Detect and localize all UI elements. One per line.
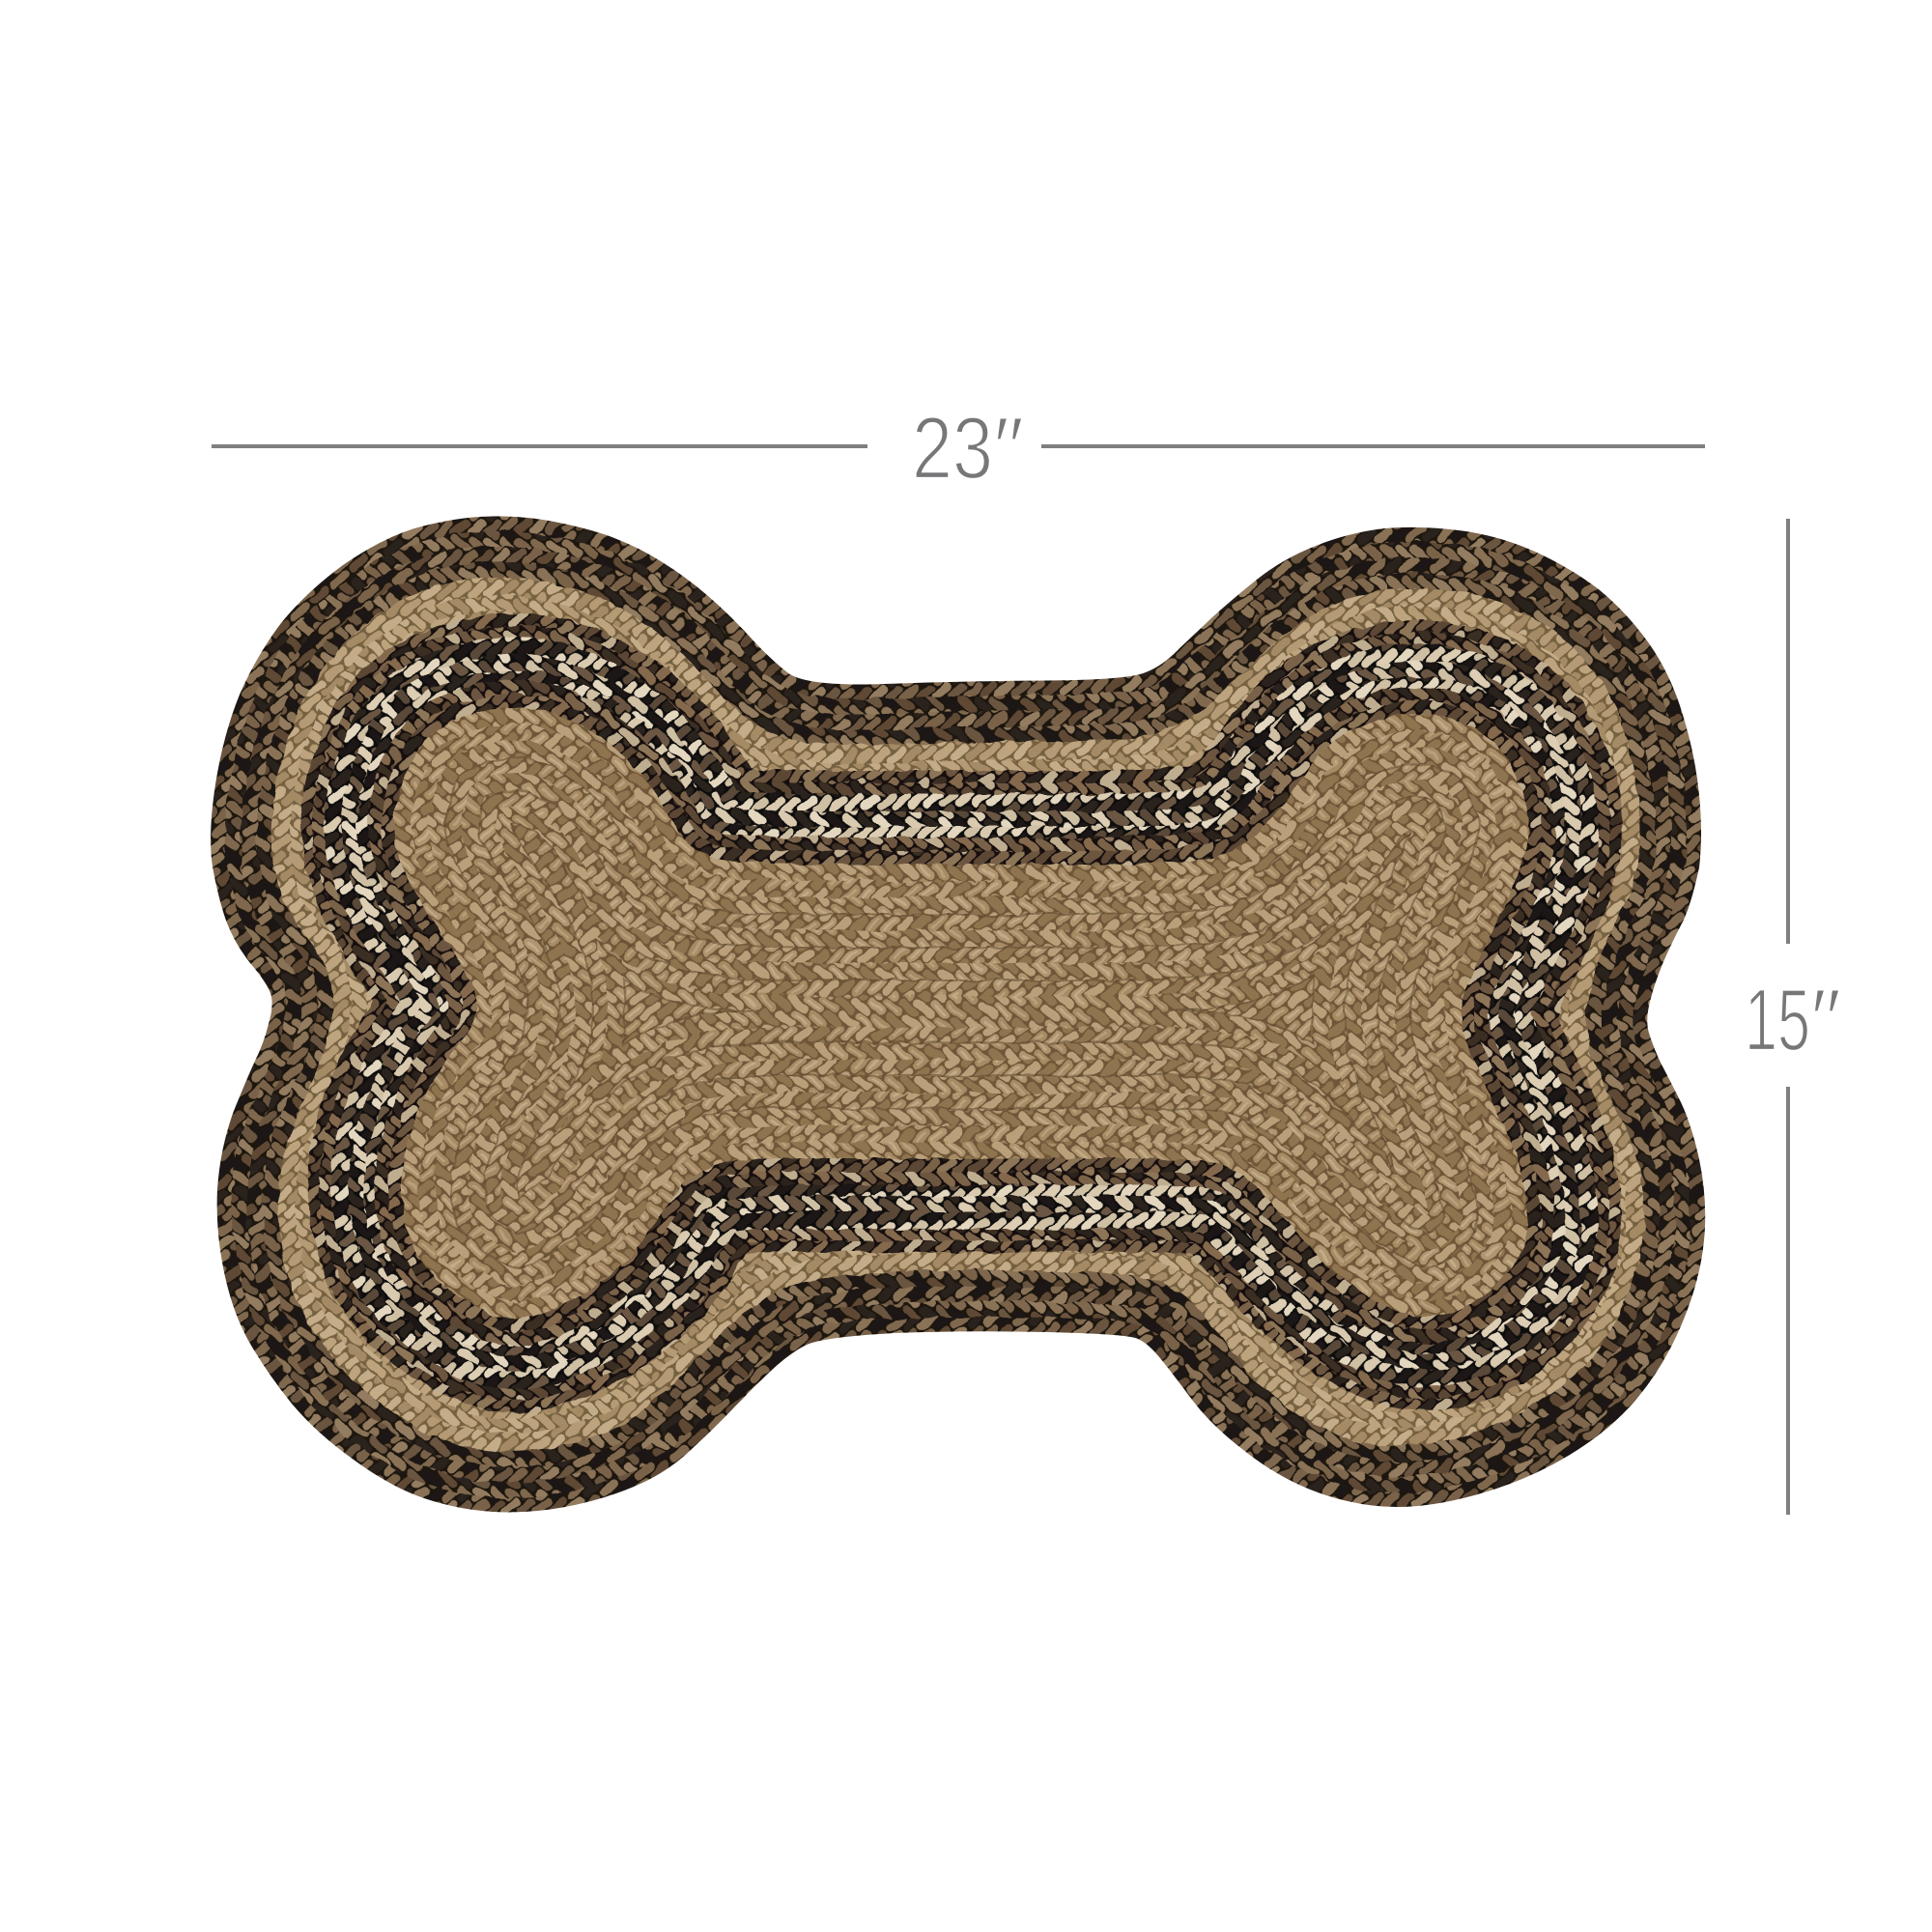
height line top [1786,519,1790,944]
height label: ″ [1810,972,1841,1069]
width label: 23 [912,400,993,497]
width line right [1041,444,1705,448]
width line left [212,444,867,448]
dark brown ring hugging the centre [394,707,1528,1319]
braided bone-shaped rug [211,516,1705,1512]
height line bottom [1786,1087,1790,1515]
central tan braided bone [394,707,1528,1319]
brown mixed ring around speckle [394,707,1528,1319]
width dimension: 23 inches [212,400,1705,497]
height dimension: 15 inches [1745,519,1841,1515]
tan braided ring [270,577,1646,1453]
height label: 15 [1745,972,1810,1069]
black and cream speckled ring [394,707,1528,1319]
width label: ″ [993,400,1024,497]
outer dark brown and black ring [211,516,1705,1512]
